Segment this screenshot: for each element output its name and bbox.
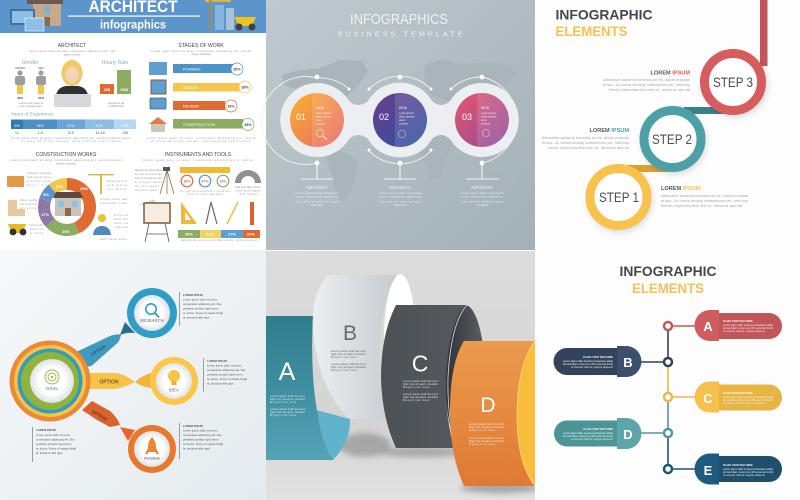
step 3 text: electa vituperatoribus mel ut, delectus aperiat xyxy=(609,88,690,92)
power text: LOREM IPSUM xyxy=(183,424,203,428)
heading: INFOGRAPHIC xyxy=(556,6,652,22)
construction works donut: 17% xyxy=(41,212,49,217)
circle 02: Lorem ipsum xyxy=(399,111,414,115)
pill E: PLACE YOUR TEXT HERE xyxy=(723,464,753,467)
construction works donut xyxy=(7,152,129,241)
ribbon D: Magnisum sam xyxy=(469,442,495,446)
idea text: consectetur adipiscing elit. Sus xyxy=(207,368,246,372)
ribbon B: Lorem ipsum with the Lorz xyxy=(331,362,367,366)
ribbon C: high fay dongein wonder xyxy=(403,395,438,399)
orange ribbon to power xyxy=(82,401,135,441)
research text: consectetur adipiscing elit. Sus xyxy=(183,302,222,306)
architect section xyxy=(15,43,131,108)
circle 02: amet xyxy=(399,118,405,122)
years of experience bar: 17% xyxy=(121,124,129,128)
construction works donut: ac lacinia xyxy=(20,206,38,210)
yellow ribbon to idea: OPTION xyxy=(99,380,119,386)
pill D xyxy=(554,418,642,449)
construction works donut: commodo vitae xyxy=(100,201,128,205)
infodata captions: INFODATA xyxy=(389,185,411,190)
panel: business template circles xyxy=(262,0,535,250)
ribbon A: Magnisum sam xyxy=(270,413,296,417)
power text: Lorem ipsum dolor sit amet, xyxy=(183,428,218,432)
years of experience bar: 1-4 xyxy=(37,131,43,135)
years of experience bar: Lorem ipsum dolor sit amet, consectetur adipiscing elit, sed do eiusmod tempor xyxy=(11,136,131,140)
infodata captions: INFODATA xyxy=(306,185,328,190)
research text: la, tincidunt nibh eget. xyxy=(183,316,210,320)
pill A: PLACE YOUR TEXT HERE xyxy=(723,320,753,323)
research text: eu luctus. Fusce id massa fringil xyxy=(183,311,223,315)
instruments and tools: 24% xyxy=(247,232,255,236)
infodata captions: consequat xyxy=(311,203,323,207)
goal text: consectetur adipiscing elit. Sus xyxy=(36,438,75,442)
goal text: Lorem ipsum dolor sit amet, xyxy=(36,433,71,437)
construction works donut: pretium eget xyxy=(27,179,51,183)
infodata captions: consequat xyxy=(394,203,406,207)
years of experience bar: Ut enim ad minim veniam, quis nostrud exercitation xyxy=(21,139,122,143)
ribbon D: D xyxy=(480,394,496,417)
stages of work: 28% xyxy=(241,86,249,90)
instruments and tools: 47% xyxy=(201,180,209,184)
title xyxy=(338,12,463,38)
circle 03 xyxy=(455,93,509,147)
power circle: POWER xyxy=(144,456,160,461)
ribbon C: Magnisum sam xyxy=(403,385,429,389)
step 2 text: et duo. Cu omnis denting contentiones per, nibh esp xyxy=(542,141,629,145)
step 3 ring xyxy=(702,52,768,118)
step 3 text xyxy=(603,70,690,92)
connector ribbons xyxy=(628,0,768,172)
ribbon A: high fay dongein wonder xyxy=(270,410,305,414)
construction works donut: nibh leo xyxy=(114,217,129,221)
construction works donut: dolor sit xyxy=(30,227,43,231)
construction works donut: sed ipsum dolor xyxy=(27,175,51,179)
pill B: elit sed diam nonummy nibh euismod tincid xyxy=(563,362,614,366)
architect section: Sed ipsum elit xyxy=(108,101,124,105)
pill B xyxy=(554,346,642,377)
construction works donut: nec auctor xyxy=(107,187,127,191)
idea text xyxy=(203,358,247,392)
pill B: Lorem ipsum dolor sit amet consectetur adipis xyxy=(563,359,614,363)
goal text: pendisse porttitor eget lorem xyxy=(36,442,72,446)
construction works donut: dolor sit xyxy=(114,221,128,225)
title: INFOGRAPHICS xyxy=(350,12,448,28)
stages of work: Ut enim ad minim veniam, quis nostrud exercitation xyxy=(151,139,252,143)
pill E xyxy=(694,454,782,484)
construction works donut: 11% xyxy=(55,184,63,189)
instruments and tools: Sed ipsum, enim non finibus rutrum, rutrum sem ac xyxy=(181,238,258,242)
construction works donut: vel pretium xyxy=(20,202,37,206)
pill D: ut laoreet dolore magna aliquam xyxy=(571,437,613,441)
header banner xyxy=(0,0,266,33)
circle 03: DATA xyxy=(481,106,490,110)
circle 02: DATA xyxy=(399,106,408,110)
ribbon D: Lorem ipsum with the Lorz xyxy=(469,436,505,440)
instruments and tools: ac nisi a tellus sed xyxy=(135,172,163,176)
pill D: PLACE YOUR TEXT HERE xyxy=(583,428,613,431)
ribbon A: high fay dongein wonder xyxy=(270,397,305,401)
stages of work: 19% xyxy=(227,104,235,108)
step 2 text: LOREM IPSUM xyxy=(590,128,629,134)
ribbon C: C xyxy=(412,350,428,376)
infodata captions: amet, consectetur adipiscing xyxy=(462,194,503,198)
ribbon A: A xyxy=(279,358,296,386)
architect section: 20$ xyxy=(104,88,110,92)
circle 01: DATA xyxy=(316,106,325,110)
circle 03: consect xyxy=(481,122,490,126)
architect section: 54% xyxy=(38,96,44,100)
ribbon B: high fay dongein wonder xyxy=(331,352,366,356)
heading: ELEMENTS xyxy=(632,280,704,296)
stages of work: PLANING xyxy=(183,66,201,72)
step 1 text: electa vituperatoribus mel ut, delectus aperiat xyxy=(661,204,742,208)
construction works donut: 43% xyxy=(80,186,88,191)
pill B: B xyxy=(623,355,633,370)
pill E: Lorem ipsum dolor sit amet consectetur adipis xyxy=(723,467,774,471)
stages of work: 20% xyxy=(233,68,241,72)
stages of work: Lorem ipsum dolor sit amet, consectetur adipiscing elit, sed do xyxy=(151,49,252,53)
years of experience bar xyxy=(11,112,136,143)
infodata captions: Cras efficitur ipsum vel lacus xyxy=(460,200,504,204)
research circle xyxy=(127,288,177,338)
connected white rings xyxy=(280,83,519,157)
ribbon D: high fay dongein wonder xyxy=(469,439,504,443)
architect section: Hourly Rate xyxy=(102,60,128,66)
years of experience bar: >20 xyxy=(122,131,128,135)
idea text: pendisse porttitor eget lorem xyxy=(207,372,243,376)
circle 03: Lorem ipsum xyxy=(481,111,496,115)
stages of work: 33% xyxy=(244,123,252,127)
step 1 text: Adimodum adolendi exercitus an vis, dolore propriae xyxy=(661,194,748,198)
ribbon D xyxy=(450,341,535,486)
infodata captions: amet, consectetur adipiscing xyxy=(380,194,421,198)
research text xyxy=(179,292,223,326)
step 3 text: et duo. Cu omnis denting contentiones per, nibh esp xyxy=(603,83,690,87)
ribbon D: high fay dongein wonder xyxy=(469,425,504,429)
ribbon A: Lorem ipsum with the Lorz xyxy=(270,407,306,411)
idea circle: IDEA xyxy=(169,388,179,392)
goal concentric circle: GOAL xyxy=(46,386,58,391)
construction works donut: Integer dolor sed xyxy=(100,197,128,201)
pill E: elit sed diam nonummy nibh euismod tincid xyxy=(723,470,774,474)
pill A xyxy=(694,310,782,341)
circle 02: dolor consect xyxy=(399,114,415,118)
construction works donut: 9% xyxy=(43,192,49,197)
ribbon B: B xyxy=(343,322,357,345)
panel: 3D ribbon cylinders xyxy=(266,251,540,500)
ribbon A: Magnisum sam xyxy=(270,400,296,404)
infodata captions: Lorem ipsum dolor consequat xyxy=(296,191,339,195)
step 3 text: Adimodum adolendi exercitus an vis, dolore propriae xyxy=(603,78,690,82)
outer thin arcs with nodes xyxy=(262,75,517,179)
instruments and tools: 23% xyxy=(206,232,214,236)
circle 01: 01 xyxy=(296,112,306,122)
orange ribbon to power: OPTION xyxy=(91,409,108,422)
construction works donut: Sed ipsum dolor xyxy=(100,237,127,241)
pill C: PLACE YOUR TEXT HERE xyxy=(723,392,753,395)
pill A: elit sed diam nonummy nibh euismod tincid xyxy=(723,326,774,330)
circle 02 xyxy=(373,93,427,147)
power text: la, tincidunt nibh eget. xyxy=(183,446,210,450)
ribbon B: Magnisum sam xyxy=(331,355,358,359)
instruments and tools: INSTRUMENTS AND TOOLS xyxy=(165,152,232,158)
circle 03: amet xyxy=(481,118,487,122)
pill A: Lorem ipsum dolor sit amet consectetur adipis xyxy=(723,323,774,327)
infodata captions: INFODATA xyxy=(471,185,493,190)
circle 01: consect xyxy=(316,122,325,126)
goal concentric circle xyxy=(10,340,90,422)
stages of work: REVIEW xyxy=(183,104,199,108)
goal text: eu luctus. Fusce id massa fringil xyxy=(36,446,76,450)
panel: step elements xyxy=(535,0,800,250)
ribbon A: Lorem ipsum with the Lorz xyxy=(270,394,306,398)
circle 01: amet xyxy=(316,118,322,122)
step 1 ring xyxy=(587,167,653,233)
world map silhouette xyxy=(282,60,516,202)
header banner: infographics xyxy=(100,20,166,32)
pill E: ut laoreet dolore magna aliquam xyxy=(723,473,765,477)
architect section: Lorem ipsum dolor sit xyxy=(19,101,44,105)
instruments and tools: nibh mollis quam xyxy=(236,188,260,192)
years of experience bar: 16% xyxy=(36,124,44,128)
research text: LOREM IPSUM xyxy=(183,293,203,297)
years of experience bar: 5% xyxy=(14,124,20,128)
circle 02: 02 xyxy=(379,112,389,122)
pill A: ut laoreet dolore magna aliquam xyxy=(723,329,765,333)
circle 03: dolor consect xyxy=(481,114,497,118)
pill C: ut laoreet dolore magna aliquam xyxy=(723,401,765,405)
construction works donut: dolor sit xyxy=(27,183,47,187)
goal text: la, tincidunt nibh eget. xyxy=(36,451,63,455)
ribbon C: high fay dongein wonder xyxy=(403,382,438,386)
ribbon D: Magnisum sam xyxy=(469,428,495,432)
panel: goal options xyxy=(0,250,266,500)
circle 01 xyxy=(290,93,344,147)
idea text: LOREM IPSUM xyxy=(207,359,227,363)
panel: architect infographics xyxy=(0,0,266,250)
power circle xyxy=(128,425,176,473)
idea circle xyxy=(150,357,198,405)
infodata captions: Cras efficitur ipsum vel lacus xyxy=(378,200,422,204)
instruments and tools: Lorem ipsum dolor sit amet, consectetur adipiscing elit, sed do xyxy=(143,158,254,162)
architect section: Gender xyxy=(22,60,39,66)
pill E: E xyxy=(704,463,713,478)
ribbon A xyxy=(266,316,350,460)
ribbon B: Magnisum sam xyxy=(331,368,358,372)
pill D: Lorem ipsum dolor sit amet consectetur adipis xyxy=(563,431,614,435)
stages of work xyxy=(146,43,257,143)
step 2 text: Adimodum adolendi exercitus an vis, dolore propriae xyxy=(542,136,629,140)
goal text xyxy=(32,427,76,462)
circle 03: 03 xyxy=(462,112,472,122)
years of experience bar: 21% xyxy=(67,124,75,128)
instruments and tools: Ut tellus euismod tincidunt xyxy=(180,189,230,193)
pill D: D xyxy=(623,427,633,442)
ribbon B: high fay dongein wonder xyxy=(331,365,366,369)
architect section: ipsum et dolor xyxy=(64,52,80,56)
construction works donut: tempor incididunt xyxy=(56,162,76,166)
ribbon B xyxy=(313,274,416,419)
years of experience bar: <1 xyxy=(15,131,19,135)
heading xyxy=(620,263,716,296)
instruments and tools: Donec tincidunt nibh xyxy=(135,176,163,180)
architect section: ut officiis dolor xyxy=(108,104,124,108)
construction works donut: Vivamus euismod xyxy=(27,171,52,175)
power text: consectetur adipiscing elit. Sus xyxy=(183,433,222,437)
pill C: C xyxy=(703,391,713,406)
yellow ribbon to idea xyxy=(86,373,151,389)
step 3 text: LOREM IPSUM xyxy=(651,70,690,76)
instruments and tools: 26% xyxy=(185,232,193,236)
architect section: ARCHITECT xyxy=(58,43,86,49)
instruments and tools: Sed eget diam metus xyxy=(236,185,261,189)
heading: ELEMENTS xyxy=(556,23,628,39)
stages of work: tempor incididunt xyxy=(191,52,211,56)
instruments and tools: a congue dolor xyxy=(135,180,162,184)
power text xyxy=(179,423,223,459)
step 3 ring: STEP 3 xyxy=(713,74,753,90)
stages of work: DESIGN xyxy=(183,85,198,90)
instruments and tools: 39% xyxy=(183,180,191,184)
circle 01: Lorem ipsum xyxy=(316,111,331,115)
pill C: Lorem ipsum dolor sit amet consectetur adipis xyxy=(723,395,774,399)
pill A: A xyxy=(703,319,713,334)
step 1 text: LOREM IPSUM xyxy=(661,186,701,192)
vertical timeline xyxy=(640,322,696,473)
construction works donut: CONSTRUCTION WORKS xyxy=(36,152,97,158)
instruments and tools xyxy=(135,152,261,242)
architect section: MEN xyxy=(38,67,44,70)
architect section: 46% xyxy=(17,96,23,100)
step 2 ring: STEP 2 xyxy=(652,131,692,147)
research circle: RESEARCH xyxy=(140,318,164,323)
pill C xyxy=(694,382,782,412)
infodata captions: Lorem ipsum dolor consequat xyxy=(460,191,504,195)
stages of work: Lorem ipsum dolor sit amet, consectetur adipiscing elit, sed do xyxy=(146,136,257,140)
panel: timeline elements xyxy=(535,250,800,500)
ribbon B: Lorem ipsum with the Lorz xyxy=(331,349,367,353)
years of experience bar: Years of Experience xyxy=(11,112,54,118)
pill B: ut laoreet dolore magna aliquam xyxy=(571,365,613,369)
stages of work: CONSTRUCTION xyxy=(183,122,215,127)
power text: pendisse porttitor eget lorem xyxy=(183,438,219,442)
heading xyxy=(556,6,652,39)
idea text: eu luctus. Fusce id massa fringil xyxy=(207,377,247,381)
heading: INFOGRAPHIC xyxy=(620,263,716,279)
title: BUSINESS TEMPLATE xyxy=(338,30,463,38)
infodata captions: amet, consectetur adipiscing xyxy=(296,194,338,198)
years of experience bar: 21% xyxy=(95,124,103,128)
instruments and tools: velit finibus xyxy=(238,192,259,196)
step 2 ring xyxy=(641,109,707,175)
infodata captions: Lorem ipsum dolor consequat xyxy=(378,191,422,195)
architect section: amet, elit sed quam xyxy=(20,104,42,108)
infodata captions xyxy=(296,185,504,207)
pill C: elit sed diam nonummy nibh euismod tincid xyxy=(723,398,774,402)
idea text: la, tincidunt nibh eget. xyxy=(207,382,234,386)
blue ribbon to research: OPTION xyxy=(90,344,107,357)
instruments and tools: 27% xyxy=(228,232,236,236)
construction works donut: Sed nibh xyxy=(30,223,44,227)
ribbon C: Lorem ipsum with the Lorz xyxy=(403,379,439,383)
goal text: LOREM IPSUM xyxy=(36,428,56,432)
architect section: WOMEN xyxy=(15,67,25,70)
construction works donut: 20% xyxy=(62,229,70,234)
research text: pendisse porttitor eget lorem xyxy=(183,306,219,310)
pill D: elit sed diam nonummy nibh euismod tincid xyxy=(563,434,614,438)
instruments and tools: for non mauris xyxy=(135,184,160,188)
power text: eu luctus. Fusce id massa fringil xyxy=(183,442,223,446)
architect section: 150$ xyxy=(120,88,128,92)
construction works donut: sed ipsum xyxy=(107,183,127,187)
blue ribbon to research xyxy=(72,322,135,368)
research text: Lorem ipsum dolor sit amet, xyxy=(183,298,218,302)
pill B: PLACE YOUR TEXT HERE xyxy=(583,356,613,359)
construction works donut: Donec at orci xyxy=(107,179,127,183)
step 1 ring: STEP 1 xyxy=(599,189,639,205)
instruments and tools: Vivamus sem xyxy=(135,188,157,192)
cast shadows xyxy=(339,433,540,493)
construction works donut: vitae est xyxy=(114,225,128,229)
infodata captions: Cras efficitur ipsum vel lacus xyxy=(296,200,339,204)
circle 01: dolor consect xyxy=(316,114,332,118)
step 2 text xyxy=(542,128,629,150)
instruments and tools: mauris sed dapibus xyxy=(187,192,224,196)
ribbon C: Lorem ipsum with the Lorz xyxy=(403,392,439,396)
idea text: Lorem ipsum dolor sit amet, xyxy=(207,364,242,368)
infodata captions: consequat xyxy=(476,203,488,207)
step 2 text: electa vituperatoribus mel ut, delectus aperiat xyxy=(548,146,629,150)
ribbon C xyxy=(381,305,485,449)
construction works donut: Risus mollis xyxy=(20,198,38,202)
construction works donut: Lorem ipsum dolor sit amet, consectetur adipiscing elit, sed do eiusmod xyxy=(10,158,123,162)
construction works donut: a lacus xyxy=(30,231,44,235)
instruments and tools: 13% xyxy=(219,180,227,184)
stages of work: STAGES OF WORK xyxy=(178,43,224,49)
architect section: Lorem ipsum dolor sit amet, consectetur adipiscing elit, sed xyxy=(29,49,116,53)
ribbon C: Magnisum sam xyxy=(403,398,429,402)
circle 02: consect xyxy=(399,122,408,126)
years of experience bar: 5-9 xyxy=(68,131,74,135)
ribbon D: Lorem ipsum with the Lorz xyxy=(469,422,505,426)
years of experience bar: 10-19 xyxy=(95,131,105,135)
instruments and tools: Maecenas lacus diam xyxy=(135,168,162,172)
step 1 text xyxy=(661,186,748,208)
construction works donut: Proin ac xyxy=(114,213,129,217)
step 1 text: et duo. Cu omnis denting contentiones per, nibh esp xyxy=(661,199,748,203)
